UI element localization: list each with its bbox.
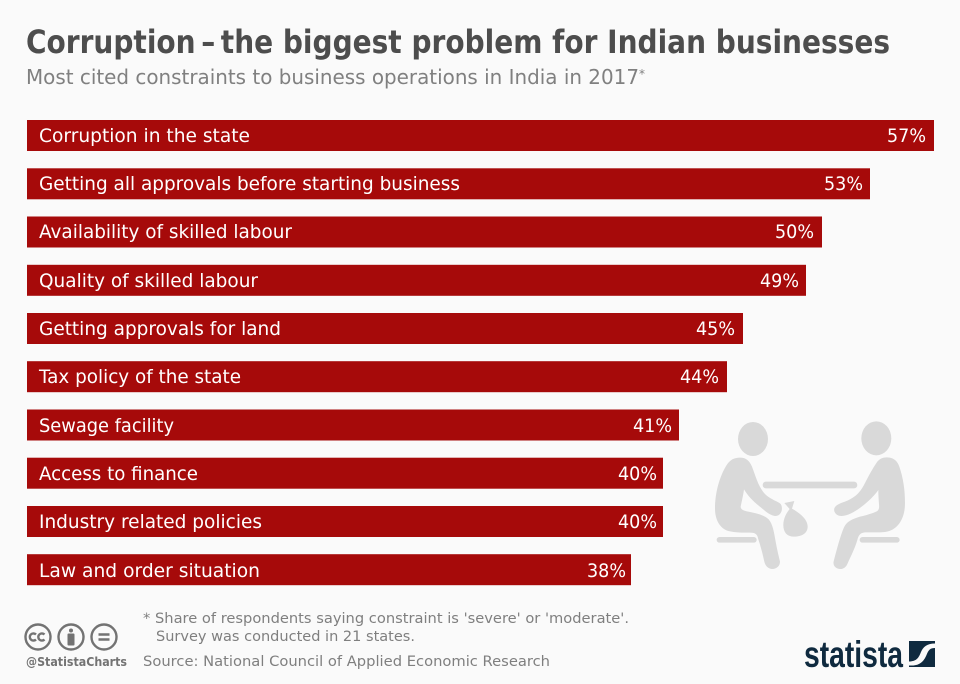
bar: Getting approvals for land: 45% — [696, 318, 735, 340]
source: Source: National Council of Applied Economic Research — [143, 654, 550, 670]
bar: Corruption in the state: 57% — [887, 125, 926, 147]
bar: Industry related policies — [27, 506, 663, 537]
bar: Availability of skilled labour: Availability of skilled labour — [39, 221, 292, 243]
bar: Sewage facility: 41% — [633, 415, 672, 437]
bar: Corruption in the state: Corruption in the state — [39, 125, 250, 147]
bar: Law and order situation — [27, 554, 631, 585]
bar: Corruption in the state — [27, 120, 934, 151]
bar: Getting all approvals before starting business: Getting all approvals before starting business — [39, 173, 460, 195]
bar: Getting approvals for land: Getting approvals for land — [39, 318, 281, 340]
bar chart — [27, 120, 934, 585]
bar: Availability of skilled labour — [27, 216, 822, 248]
bar: Access to finance: Access to finance — [39, 463, 198, 485]
footnote: Survey was conducted in 21 states. — [156, 629, 415, 645]
bar: Getting all approvals before starting business: 53% — [824, 173, 863, 195]
bar: Tax policy of the state: 44% — [680, 366, 719, 388]
icon: two seated people exchanging a money bag — [715, 421, 905, 569]
footnote: * Share of respondents saying constraint is 'severe' or 'moderate'. — [143, 611, 629, 627]
bar: Industry related policies: 40% — [618, 511, 657, 533]
icon: creative commons licence — [26, 624, 116, 650]
bar: Tax policy of the state — [27, 361, 727, 392]
bar: Law and order situation: 38% — [587, 560, 626, 582]
bar: Industry related policies: Industry related policies — [39, 511, 262, 533]
handle: @StatistaCharts — [26, 655, 127, 669]
bar: Availability of skilled labour: 50% — [775, 221, 814, 243]
bar: Quality of skilled labour — [27, 265, 806, 296]
footnote — [143, 611, 629, 645]
bar: Sewage facility: Sewage facility — [39, 415, 174, 437]
subtitle: Most cited constraints to business operations in India in 2017 — [26, 65, 639, 89]
bar: Access to finance: 40% — [618, 463, 657, 485]
bar: Getting approvals for land — [27, 313, 743, 344]
bar: Quality of skilled labour: 49% — [760, 270, 799, 292]
bar: Access to finance — [27, 458, 663, 489]
subtitle: * — [639, 67, 645, 81]
bar: Sewage facility — [27, 410, 679, 440]
bar: Quality of skilled labour: Quality of skilled labour — [39, 270, 258, 292]
logo: statista: statista — [804, 634, 903, 675]
bar: Getting all approvals before starting business — [27, 168, 870, 199]
bar: Tax policy of the state: Tax policy of the state — [38, 366, 241, 388]
bar: Law and order situation: Law and order situation — [39, 560, 260, 582]
